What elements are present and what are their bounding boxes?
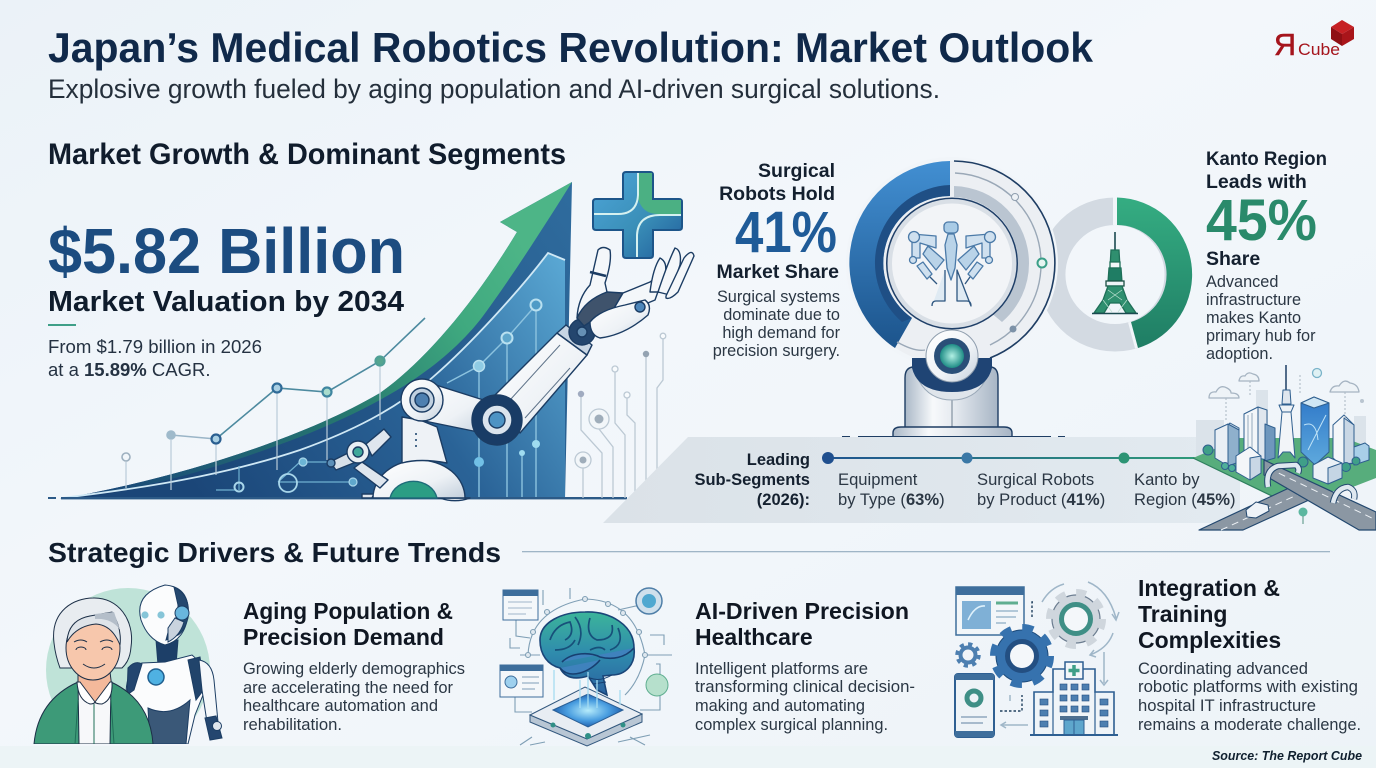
title: Japan’s Medical Robotics Revolution: Market Outlook [48,24,1094,71]
sub-segments label: (2026): [757,491,810,509]
driver 1 text [243,598,465,734]
illustration: AI brain and chip [500,588,672,746]
illustration: robot arm [327,248,694,501]
driver 1 text: are accelerating the need for [243,679,454,697]
driver 1 text: Precision Demand [243,624,444,650]
subtitle: Explosive growth fueled by aging population and AI-driven surgical solutions. [48,74,940,104]
Kanto share text: infrastructure [1206,291,1301,309]
driver 2 text: transforming clinical decision- [695,678,915,696]
driver 3 text: remains a moderate challenge. [1138,716,1361,734]
surgical robots share text: 41% [735,200,837,265]
illustration: isometric city [1193,365,1376,530]
panel: leading sub-segments strip [603,437,1240,523]
icon: medical cross [593,172,682,258]
accent rule [48,324,76,326]
Kanto share text: primary hub for [1206,327,1316,345]
Kanto share text: Leads with [1206,171,1307,193]
pedestal and camera joint [842,330,1065,438]
surgical robots share text: Surgical systems [717,288,840,306]
market valuation label: Market Valuation by 2034 [48,286,404,318]
logo: RCube: Я [1274,27,1296,62]
surgical robots share text: Market Share [717,261,839,283]
sub-segment: Kanto: Kanto by [1134,470,1200,489]
driver 1 text: rehabilitation. [243,716,342,734]
CAGR text: 15.89% CAGR. [84,359,210,380]
surgical robots share text: high demand for [722,324,841,342]
robot companion [126,585,222,744]
sub-segment: Kanto: 45%) [1197,490,1235,509]
surgical robots share text: dominate due to [723,306,840,324]
Kanto share text: Share [1206,248,1260,270]
big number: market value: $5.82 Billion [48,215,405,287]
heading: strategic drivers: Strategic Drivers & Future Trends [48,537,501,568]
driver 3 text: Coordinating advanced [1138,660,1308,678]
timeline with dots [822,452,1198,464]
sub-segment: surgical robots: 41%) [1066,490,1105,509]
chart: rising market growth curve with arrow [48,182,627,499]
Kanto share text: 45% [1206,188,1317,253]
driver 1 text: Growing elderly demographics [243,660,465,678]
driver 3 text: Training [1138,601,1227,627]
icon: surgical robot arms [908,222,996,306]
driver 2 text: Healthcare [695,624,813,650]
driver 2 text [695,598,915,734]
sub-segment: equipment: by Type ( [838,490,906,509]
illustration: elderly woman and robot [34,585,222,752]
CAGR text: From $1.79 billion in 2026 [48,336,262,357]
logo: RCube: Cube [1298,40,1340,59]
driver 3 text: Integration & [1138,575,1280,601]
donut: Kanto 45% share [1052,198,1192,348]
driver 2 text: Intelligent platforms are [695,660,868,678]
driver 2 text: making and automating [695,697,865,715]
icon: Tokyo tower [1092,232,1138,314]
sub-segment: surgical robots: Surgical Robots [977,470,1094,489]
Kanto share text: makes Kanto [1206,309,1301,327]
Kanto share text: adoption. [1206,345,1273,363]
robot hand [577,248,694,338]
sub-segments label: Leading [747,451,810,469]
surgical robots share text: Surgical [758,160,835,182]
surgical robots share text [713,160,841,360]
illustration: gears, phone and hospital [955,582,1119,737]
driver 1 text: healthcare automation and [243,697,438,715]
sub-segment: equipment: 63%) [906,490,945,509]
driver 2 text: AI-Driven Precision [695,598,909,624]
gauge: surgical robots 41% [846,157,1058,369]
logo: RCube [1274,20,1354,62]
elderly woman [34,598,153,744]
driver 3 text: Complexities [1138,627,1281,653]
source note: Source: The Report Cube [1212,749,1362,763]
surgical robots share text: Robots Hold [719,183,835,205]
sub-segments label: Sub-Segments [694,471,810,489]
Kanto share text [1206,148,1327,363]
sub-segment: Kanto: Region ( [1134,490,1197,509]
line chart with data points [122,300,542,497]
driver 1 text: Aging Population & [243,598,453,624]
Kanto share text: Kanto Region [1206,148,1327,170]
sub-segment: surgical robots: by Product ( [977,490,1067,509]
driver 3 text: robotic platforms with existing [1138,678,1358,696]
sub-segment: equipment: Equipment [838,470,918,489]
surgical robots share text: precision surgery. [713,342,840,360]
driver 3 text: hospital IT infrastructure [1138,697,1316,715]
arm base dome [362,460,470,501]
heading: market growth: Market Growth & Dominant Segments [48,138,566,171]
CAGR text: at a [48,359,84,380]
Kanto share text: Advanced [1206,273,1278,291]
sub-segments label [694,451,810,509]
driver 2 text: complex surgical planning. [695,716,888,734]
circuit lines at right of chart [575,333,666,498]
driver 3 text [1138,575,1361,734]
